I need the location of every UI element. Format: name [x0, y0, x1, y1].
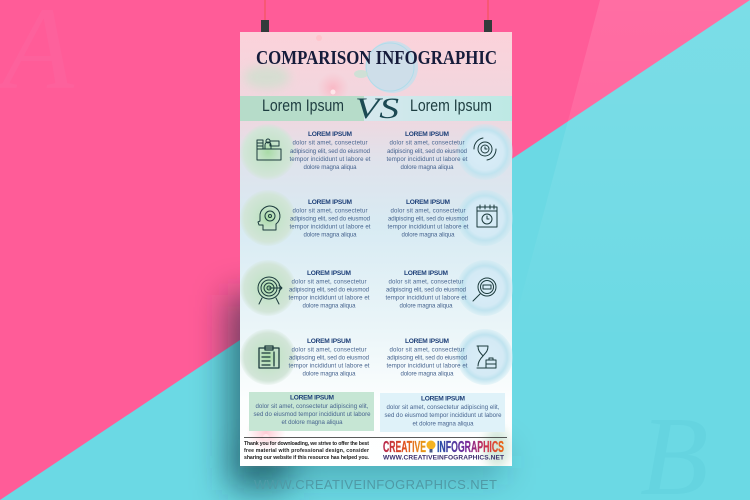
text: item 3 left: adipiscing elit, sed do eiusmod: [289, 286, 369, 294]
icon: clipboard checklist: [259, 346, 279, 368]
left item 3: target: [240, 260, 370, 316]
icon: archery target: [258, 277, 282, 304]
icon: reception desk: [257, 139, 281, 160]
left item 4: checklist: [240, 329, 370, 385]
text: item 1 left: dolor sit amet, consectetur: [292, 140, 368, 146]
icon: circular clock: [474, 138, 496, 160]
logo: Creative Infographics: CREATIVE: [383, 439, 426, 456]
text: item 2 left: dolore magna aliqua: [304, 232, 357, 238]
poster panel: [240, 32, 513, 468]
text: item 2 right: dolore magna aliqua: [402, 232, 455, 238]
text: item 4 left: dolor sit amet, consectetur: [292, 346, 366, 354]
text: item 3 left: dolor sit amet, consectetur: [292, 278, 366, 286]
text: item 2 left: LOREM IPSUM: [308, 199, 352, 206]
text: item 4 right: adipiscing elit, sed do eiusmod: [387, 354, 467, 362]
text: item 1 right: [386, 131, 468, 171]
text: item 4 left: dolore magna aliqua: [302, 370, 356, 378]
summary box right: LOREM IPSUM: [421, 396, 466, 402]
text: item 2 right: adipiscing elit, sed do eiusmod: [388, 216, 468, 222]
text: item 4 left: adipiscing elit, sed do eiusmod: [289, 354, 369, 362]
summary box left: dolor sit amet, consectetur adipiscing elit,: [256, 403, 369, 410]
poster decorations: [244, 35, 510, 468]
footer note: [244, 441, 370, 461]
text: item 4 left: [288, 338, 370, 378]
text: item 1 left: dolore magna aliqua: [304, 164, 357, 171]
text: item 1 left: LOREM IPSUM: [308, 131, 352, 138]
icon: calendar clock: [477, 205, 497, 227]
summary box left: LOREM IPSUM: [290, 394, 334, 402]
text: item 4 left: LOREM IPSUM: [307, 338, 352, 345]
right option title: Lorem Ipsum: [410, 97, 492, 115]
summary box right: [380, 393, 505, 432]
icon: magnifying glass: [473, 278, 496, 301]
summary box right: et dolore magna aliqua: [412, 420, 474, 428]
footer note: sharing our website if this resource has helped you.: [244, 455, 370, 461]
summary box right: sed do eiusmod tempor incididunt ut labore: [384, 412, 502, 419]
footer note: free material with professional design, consider: [244, 448, 369, 454]
left item 1: desk: [240, 124, 371, 180]
text: item 3 right: tempor incididunt ut labore et: [386, 294, 467, 302]
text: item 4 left: tempor incididunt ut labore et: [288, 362, 370, 370]
text: item 2 right: LOREM IPSUM: [406, 199, 450, 206]
text: item 2 right: dolor sit amet, consectetur: [390, 208, 466, 214]
text: item 4 right: LOREM IPSUM: [405, 338, 450, 345]
icon: hourglass and briefcase: [477, 346, 496, 368]
logo: Creative Infographics: INFOGRAPHICS: [437, 439, 504, 456]
left item 2: head: [240, 190, 371, 246]
logo: Creative Infographics: [383, 439, 504, 462]
right item 3: magnifier: [386, 260, 513, 316]
text: item 4 right: [386, 338, 468, 378]
text: item 2 right: tempor incididunt ut labore et: [388, 224, 469, 230]
versus band: [240, 92, 512, 125]
text: item 3 right: adipiscing elit, sed do eiusmod: [386, 286, 466, 294]
text: item 3 left: dolore magna aliqua: [302, 302, 356, 310]
summary box left: sed do eiusmod tempor incididunt ut labore: [254, 411, 371, 418]
website caption: WWW.CREATIVEINFOGRAPHICS.NET: [254, 477, 497, 492]
text: item 1 right: dolor sit amet, consectetur: [390, 140, 464, 146]
text: item 1 right: adipiscing elit, sed do eiusmod: [387, 148, 467, 155]
text: item 2 left: tempor incididunt ut labore et: [290, 224, 371, 230]
right item 1: clock orbit: [386, 124, 513, 180]
text: item 3 right: LOREM IPSUM: [404, 270, 448, 277]
right item 4: hourglass: [386, 329, 513, 385]
text: item 1 right: dolore magna aliqua: [400, 164, 454, 171]
right item 2: calendar: [388, 190, 513, 246]
text: item 1 left: tempor incididunt ut labore et: [290, 156, 371, 163]
hanging clip left: [261, 0, 269, 36]
icon: head with eye: [258, 206, 280, 230]
footer note: Thank you for downloading, we strive to offer the best: [244, 441, 369, 447]
left option title: Lorem Ipsum: [262, 97, 344, 115]
icon: light bulb: [426, 440, 436, 452]
text: item 2 left: [290, 199, 371, 238]
text: item 3 left: LOREM IPSUM: [307, 270, 352, 277]
text: item 2 left: dolor sit amet, consectetur: [292, 208, 368, 214]
poster shadow: [228, 295, 502, 490]
text: item 1 right: tempor incididunt ut labore et: [386, 156, 468, 163]
text: item 3 left: [288, 270, 370, 310]
text: item 2 right: [388, 199, 469, 238]
title: COMPARISON INFOGRAPHIC: [256, 47, 497, 69]
summary box left: [249, 392, 374, 431]
summary box left: et dolore magna aliqua: [282, 419, 343, 426]
text: item 4 right: dolore magna aliqua: [400, 370, 454, 378]
text: item 1 right: LOREM IPSUM: [405, 131, 450, 138]
logo: Creative Infographics: WWW.CREATIVEINFOGRAPHICS.NET: [383, 454, 504, 462]
hanging clip right: [484, 0, 492, 36]
text: item 3 right: [386, 270, 467, 310]
text: item 4 right: tempor incididunt ut labore et: [386, 362, 468, 370]
text: item 4 right: dolor sit amet, consectetur: [390, 346, 464, 354]
VS mark: VS: [355, 92, 399, 125]
text: item 3 right: dolor sit amet, consectetur: [388, 278, 464, 286]
text: item 1 left: [290, 131, 371, 171]
text: item 1 left: adipiscing elit, sed do eiusmod: [290, 148, 370, 155]
text: item 2 left: adipiscing elit, sed do eiusmod: [290, 216, 370, 222]
summary box right: dolor sit amet, consectetur adipiscing elit,: [386, 404, 500, 411]
text: item 3 right: dolore magna aliqua: [400, 302, 453, 310]
text: item 3 left: tempor incididunt ut labore et: [288, 294, 370, 302]
